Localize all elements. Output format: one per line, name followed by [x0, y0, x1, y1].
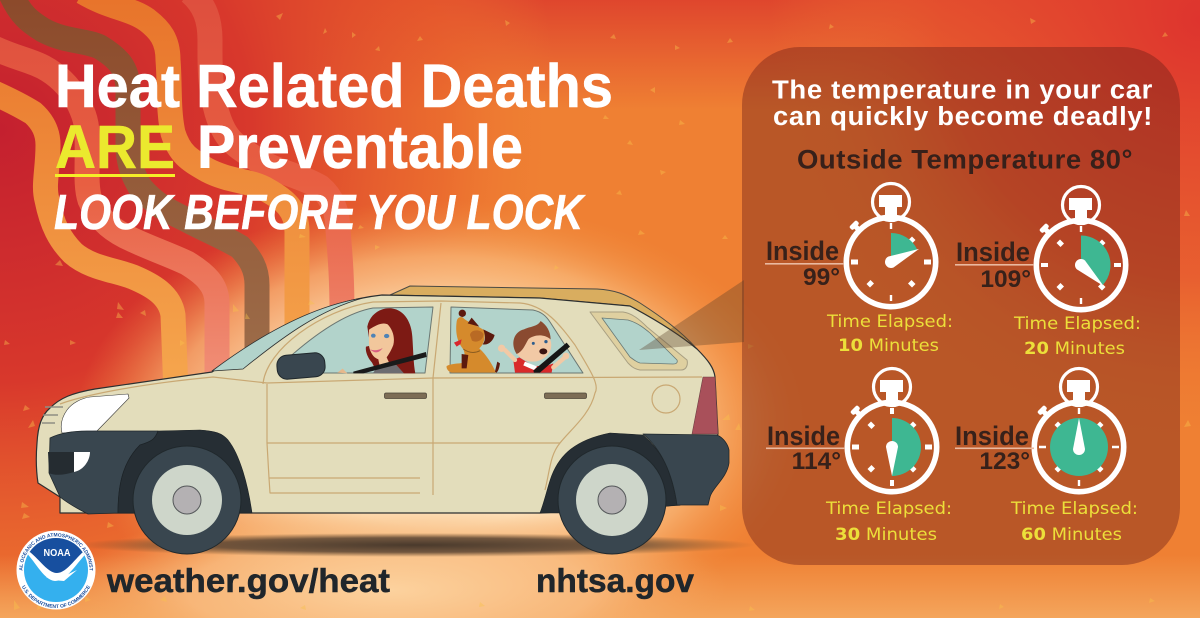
inside temperature 114: 114° [792, 448, 841, 475]
title: LOOK BEFORE YOU LOCK [54, 186, 586, 240]
time elapsed 10 minutes: Time Elapsed: [826, 312, 953, 332]
inside temperature 109: Inside [956, 237, 1030, 267]
quarter window [590, 312, 687, 370]
dog [447, 310, 500, 373]
inside temperature 99: Inside [766, 236, 839, 266]
car body [36, 295, 718, 513]
link: weather.gov/heat: weather.gov/heat [106, 563, 390, 600]
body lines [60, 301, 702, 495]
stopwatch 10 minutes [846, 184, 936, 307]
mirror [276, 352, 326, 380]
rear wheel [558, 446, 666, 554]
NOAA logo: NATIONAL OCEANIC AND ATMOSPHERIC ADMINISTRATION [19, 533, 93, 571]
inside temperature 114 [766, 421, 845, 475]
headlight [61, 394, 129, 433]
inside temperature 123: Inside [955, 421, 1029, 451]
panel heading: The temperature in your car [772, 76, 1153, 104]
time elapsed 30 minutes: 30 Minutes [835, 525, 937, 545]
inside temperature 123 [955, 421, 1034, 475]
ground shadow [75, 533, 755, 557]
woman driver [337, 308, 427, 373]
time elapsed 60 minutes: Time Elapsed: [1010, 499, 1138, 519]
inside temperature 114: Inside [767, 421, 840, 451]
time elapsed 30 minutes [825, 499, 952, 545]
title: Heat Related Deaths [55, 52, 613, 120]
time elapsed 10 minutes: 10 Minutes [838, 336, 939, 356]
rear bumper [643, 434, 729, 505]
beam from car window to panel [639, 280, 744, 350]
front wheel [133, 446, 241, 554]
car [36, 286, 729, 554]
windshield [212, 298, 363, 371]
time elapsed 20 minutes: 20 Minutes [1024, 339, 1125, 359]
NOAA logo: U.S. DEPARTMENT OF COMMERCE [22, 585, 90, 608]
front window [280, 307, 433, 373]
panel heading [772, 76, 1153, 131]
fog lamp [48, 452, 90, 475]
door handles [384, 393, 586, 398]
NOAA wordmark: NOAA [44, 548, 70, 559]
inside temperature 123: 123° [979, 448, 1030, 475]
rear wheel arch [540, 433, 677, 513]
roof rack [390, 286, 697, 349]
title: ARE [55, 113, 175, 181]
time elapsed 60 minutes: 60 Minutes [1021, 525, 1122, 545]
inside temperature 109: 109° [980, 266, 1031, 293]
heat waves rising behind the car [0, 0, 342, 392]
child [498, 321, 570, 373]
inside temperature 99 [765, 236, 844, 291]
time elapsed 10 minutes [826, 312, 953, 356]
time elapsed 20 minutes: Time Elapsed: [1013, 314, 1141, 334]
inside temperature 99: 99° [803, 264, 840, 291]
front wheel arch [118, 430, 252, 513]
grille lines [42, 407, 63, 423]
link: nhtsa.gov: nhtsa.gov [536, 563, 694, 600]
rear side window [450, 307, 583, 373]
time elapsed 60 minutes [1010, 499, 1138, 545]
stopwatch 20 minutes [1036, 186, 1126, 310]
NOAA logo [16, 530, 96, 610]
tail light [692, 377, 718, 434]
panel: temperature timeline [742, 47, 1180, 565]
stopwatch 60 minutes [1034, 368, 1124, 492]
time elapsed 30 minutes: Time Elapsed: [825, 499, 952, 519]
outside temperature heading: Outside Temperature 80° [797, 144, 1133, 174]
panel heading: can quickly become deadly! [773, 103, 1153, 131]
inside temperature 109 [955, 237, 1034, 293]
title: Preventable [197, 113, 523, 181]
stopwatch 30 minutes [847, 368, 937, 492]
title [54, 52, 613, 240]
time elapsed 20 minutes [1013, 314, 1141, 359]
front bumper [49, 431, 158, 514]
